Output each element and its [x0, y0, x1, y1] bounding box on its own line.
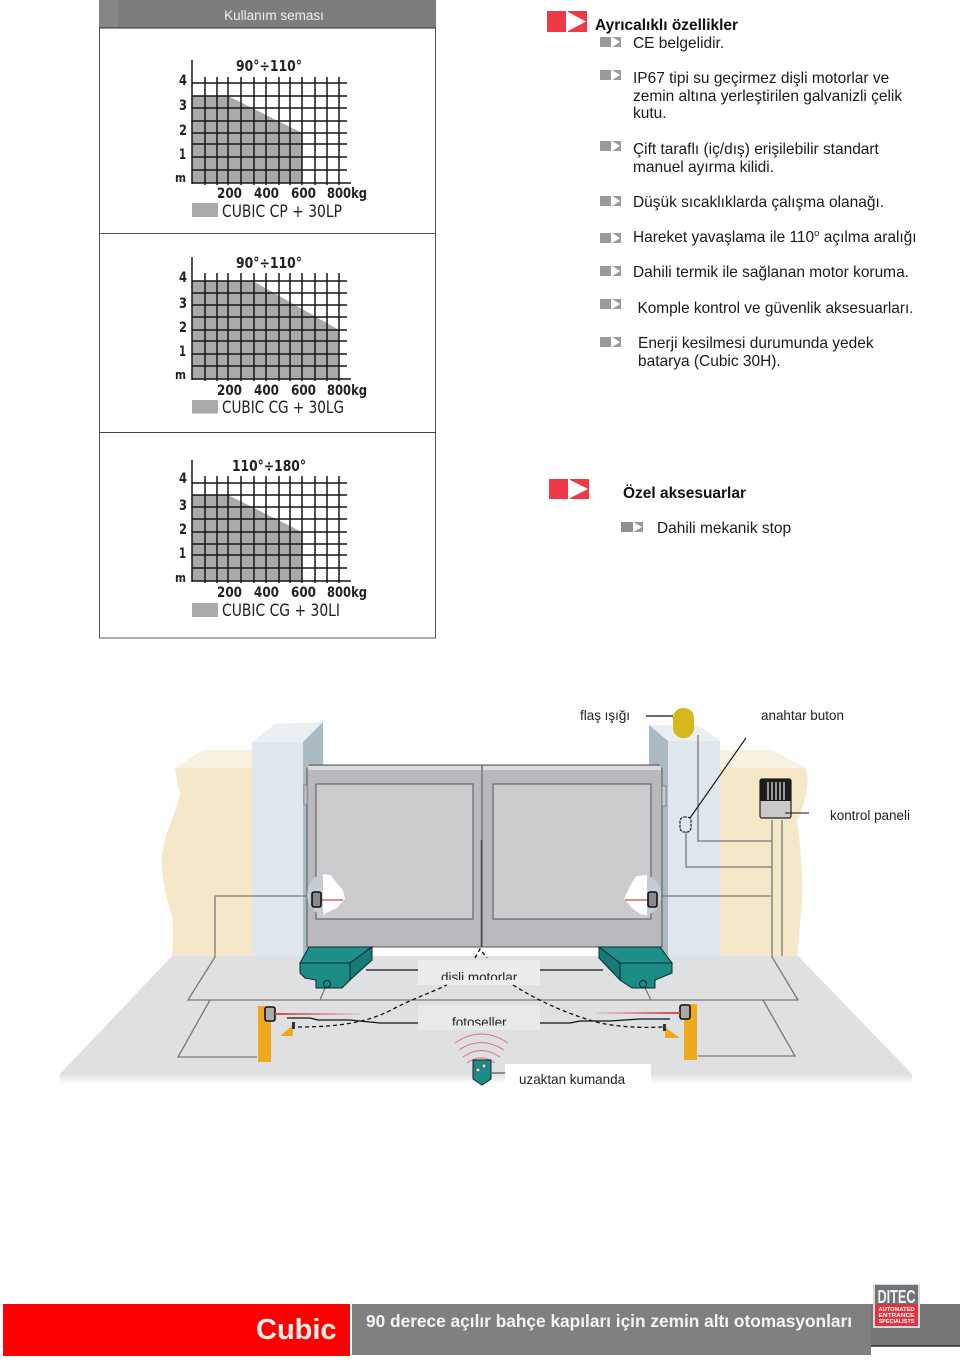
- chart: CUBIC CG + 30LG: 200: [217, 383, 242, 399]
- flash light: [646, 708, 694, 738]
- chart: CUBIC CG + 30LI: 2: [179, 522, 187, 538]
- right floor photocell post: [596, 1004, 697, 1060]
- chart: CUBIC CG + 30LG: 600: [291, 383, 316, 399]
- section: special accessories: [549, 479, 791, 537]
- heading: Özel aksesuarlar: Özel aksesuarlar: [623, 485, 746, 502]
- label: fotoseller: [418, 1005, 540, 1030]
- chart: CUBIC CP + 30LP: 600: [291, 186, 316, 202]
- bullet icon: [600, 233, 621, 243]
- chart: CUBIC CG + 30LI: 110°÷180°: [232, 457, 306, 475]
- accessory text: Dahili mekanik stop: [657, 520, 791, 537]
- chart: CUBIC CG + 30LI: 1: [179, 546, 186, 562]
- chart: CUBIC CG + 30LI: 400: [254, 585, 279, 601]
- logo: Ditec: ENTRANCE: [878, 1313, 915, 1319]
- chart: CUBIC CP + 30LP: CUBIC CP + 30LP: [222, 202, 342, 222]
- logo: Ditec: SPECIALISTS: [878, 1319, 915, 1325]
- red product block: Cubic: [256, 1314, 337, 1346]
- bullet icon: [600, 141, 621, 151]
- right wall: [720, 750, 808, 956]
- left gate leaf: [304, 765, 482, 947]
- chart: CUBIC CG + 30LG: 400: [254, 383, 279, 399]
- left floor photocell post: [258, 1006, 360, 1062]
- panel header: Kullanım seması: [99, 0, 436, 28]
- chart: CUBIC CG + 30LI: CUBIC CG + 30LI: [222, 601, 340, 621]
- chart: CUBIC CG + 30LI: [175, 457, 367, 621]
- chart: CUBIC CG + 30LG: 3: [179, 296, 187, 312]
- label: dişli motorlar: dişli motorlar: [441, 970, 518, 985]
- feature text: Dahili termik ile sağlanan motor koruma.: [633, 264, 909, 281]
- feature text: kutu.: [633, 105, 667, 122]
- feature text: CE belgelidir.: [633, 35, 724, 52]
- right grey band: [871, 1304, 960, 1346]
- feature text: IP67 tipi su geçirmez dişli motorlar ve: [633, 70, 889, 87]
- icon: red arrow: [549, 479, 589, 499]
- chart: CUBIC CG + 30LG: 4: [179, 270, 187, 286]
- bullet icon: [600, 196, 621, 206]
- chart: CUBIC CG + 30LI: m: [175, 571, 186, 585]
- label: uzaktan kumanda: uzaktan kumanda: [519, 1072, 626, 1087]
- control panel: [760, 779, 809, 818]
- feature text: Düşük sıcaklıklarda çalışma olanağı.: [633, 194, 884, 211]
- chart: CUBIC CP + 30LP: 2: [179, 123, 187, 139]
- chart: CUBIC CP + 30LP: 1: [179, 147, 186, 163]
- feature text: Enerji kesilmesi durumunda yedek: [638, 335, 874, 352]
- left gate photocell: [307, 874, 345, 915]
- chart: CUBIC CG + 30LG: m: [175, 368, 186, 382]
- bullet icon: [600, 337, 621, 347]
- chart: CUBIC CP + 30LP: m: [175, 171, 186, 185]
- bullet icon: [600, 70, 621, 80]
- logo: Ditec: AUTOMATED: [878, 1307, 915, 1313]
- chart: CUBIC CP + 30LP: 800kg: [327, 186, 367, 202]
- ground: [60, 956, 912, 1084]
- right gate leaf: [482, 765, 666, 947]
- section: features list: [547, 11, 917, 370]
- chart: CUBIC CP + 30LP: 400: [254, 186, 279, 202]
- feature text: manuel ayırma kilidi.: [633, 159, 774, 176]
- feature text: o: [814, 228, 819, 239]
- chart: CUBIC CP + 30LP: 4: [179, 73, 187, 89]
- grey title block: 90 derece açılır bahçe kapıları için zemin altı otomasyonları: [366, 1311, 852, 1331]
- bullet icon: [621, 522, 643, 532]
- label: flaş ışığı: flaş ışığı: [580, 708, 630, 723]
- chart: CUBIC CG + 30LG: 800kg: [327, 383, 367, 399]
- chart: CUBIC CG + 30LG: CUBIC CG + 30LG: [222, 398, 344, 418]
- label: fotoseller: fotoseller: [452, 1015, 507, 1030]
- left pillar: [252, 722, 323, 956]
- label: anahtar buton: anahtar buton: [761, 708, 844, 723]
- chart: CUBIC CG + 30LG: 90°÷110°: [236, 254, 302, 272]
- chart: CUBIC CG + 30LG: 1: [179, 344, 186, 360]
- feature text: zemin altına yerleştirilen galvanizli çelik: [633, 88, 902, 105]
- label: kontrol paneli: kontrol paneli: [830, 808, 910, 823]
- feature text: Komple kontrol ve güvenlik aksesuarları.: [638, 300, 914, 317]
- logo: Ditec: DITEC: [878, 1287, 916, 1307]
- chart: CUBIC CG + 30LI: 600: [291, 585, 316, 601]
- chart: CUBIC CP + 30LP: [175, 57, 367, 222]
- heading: Ayrıcalıklı özellikler: Ayrıcalıklı özellikler: [595, 17, 738, 34]
- remote control with signal waves: [455, 1034, 508, 1085]
- label: uzaktan kumanda: [505, 1064, 651, 1096]
- chart: CUBIC CP + 30LP: 3: [179, 98, 187, 114]
- diagram: gate installation: [60, 708, 912, 1086]
- right gear motor: [599, 947, 672, 988]
- chart: CUBIC CG + 30LI: 200: [217, 585, 242, 601]
- icon: red arrow: [547, 11, 587, 32]
- logo: Ditec: [873, 1284, 920, 1328]
- chart: CUBIC CG + 30LG: 2: [179, 320, 187, 336]
- bullet icon: [600, 299, 621, 309]
- chart: CUBIC CP + 30LP: 200: [217, 186, 242, 202]
- bullet icon: [600, 266, 621, 276]
- panel header: Kullanım seması: Kullanım seması: [224, 8, 324, 23]
- feature text: açılma aralığı: [819, 229, 917, 246]
- panel: usage charts: [99, 0, 436, 638]
- chart: CUBIC CG + 30LI: 800kg: [327, 585, 367, 601]
- wiring: [178, 735, 798, 1057]
- chart: CUBIC CG + 30LI: 4: [179, 471, 187, 487]
- right pillar: [649, 725, 720, 956]
- label: dişli motorlar: [366, 949, 603, 985]
- feature text: Hareket yavaşlama ile 110: [633, 229, 814, 246]
- photocell leader lines: [287, 985, 670, 1027]
- key switch: [680, 738, 746, 832]
- feature text: Çift taraflı (iç/dış) erişilebilir standart: [633, 141, 879, 158]
- chart: CUBIC CP + 30LP: 90°÷110°: [236, 57, 302, 75]
- chart: CUBIC CG + 30LI: 3: [179, 498, 187, 514]
- grey title block: [352, 1304, 871, 1355]
- feature text: batarya (Cubic 30H).: [638, 353, 781, 370]
- red product block: [3, 1304, 350, 1356]
- left wall: [162, 750, 252, 956]
- bullet icon: [600, 37, 621, 47]
- footer bar: [3, 1284, 960, 1356]
- right gate photocell: [624, 875, 661, 915]
- chart: CUBIC CG + 30LG: [175, 254, 367, 418]
- left gear motor: [300, 947, 372, 988]
